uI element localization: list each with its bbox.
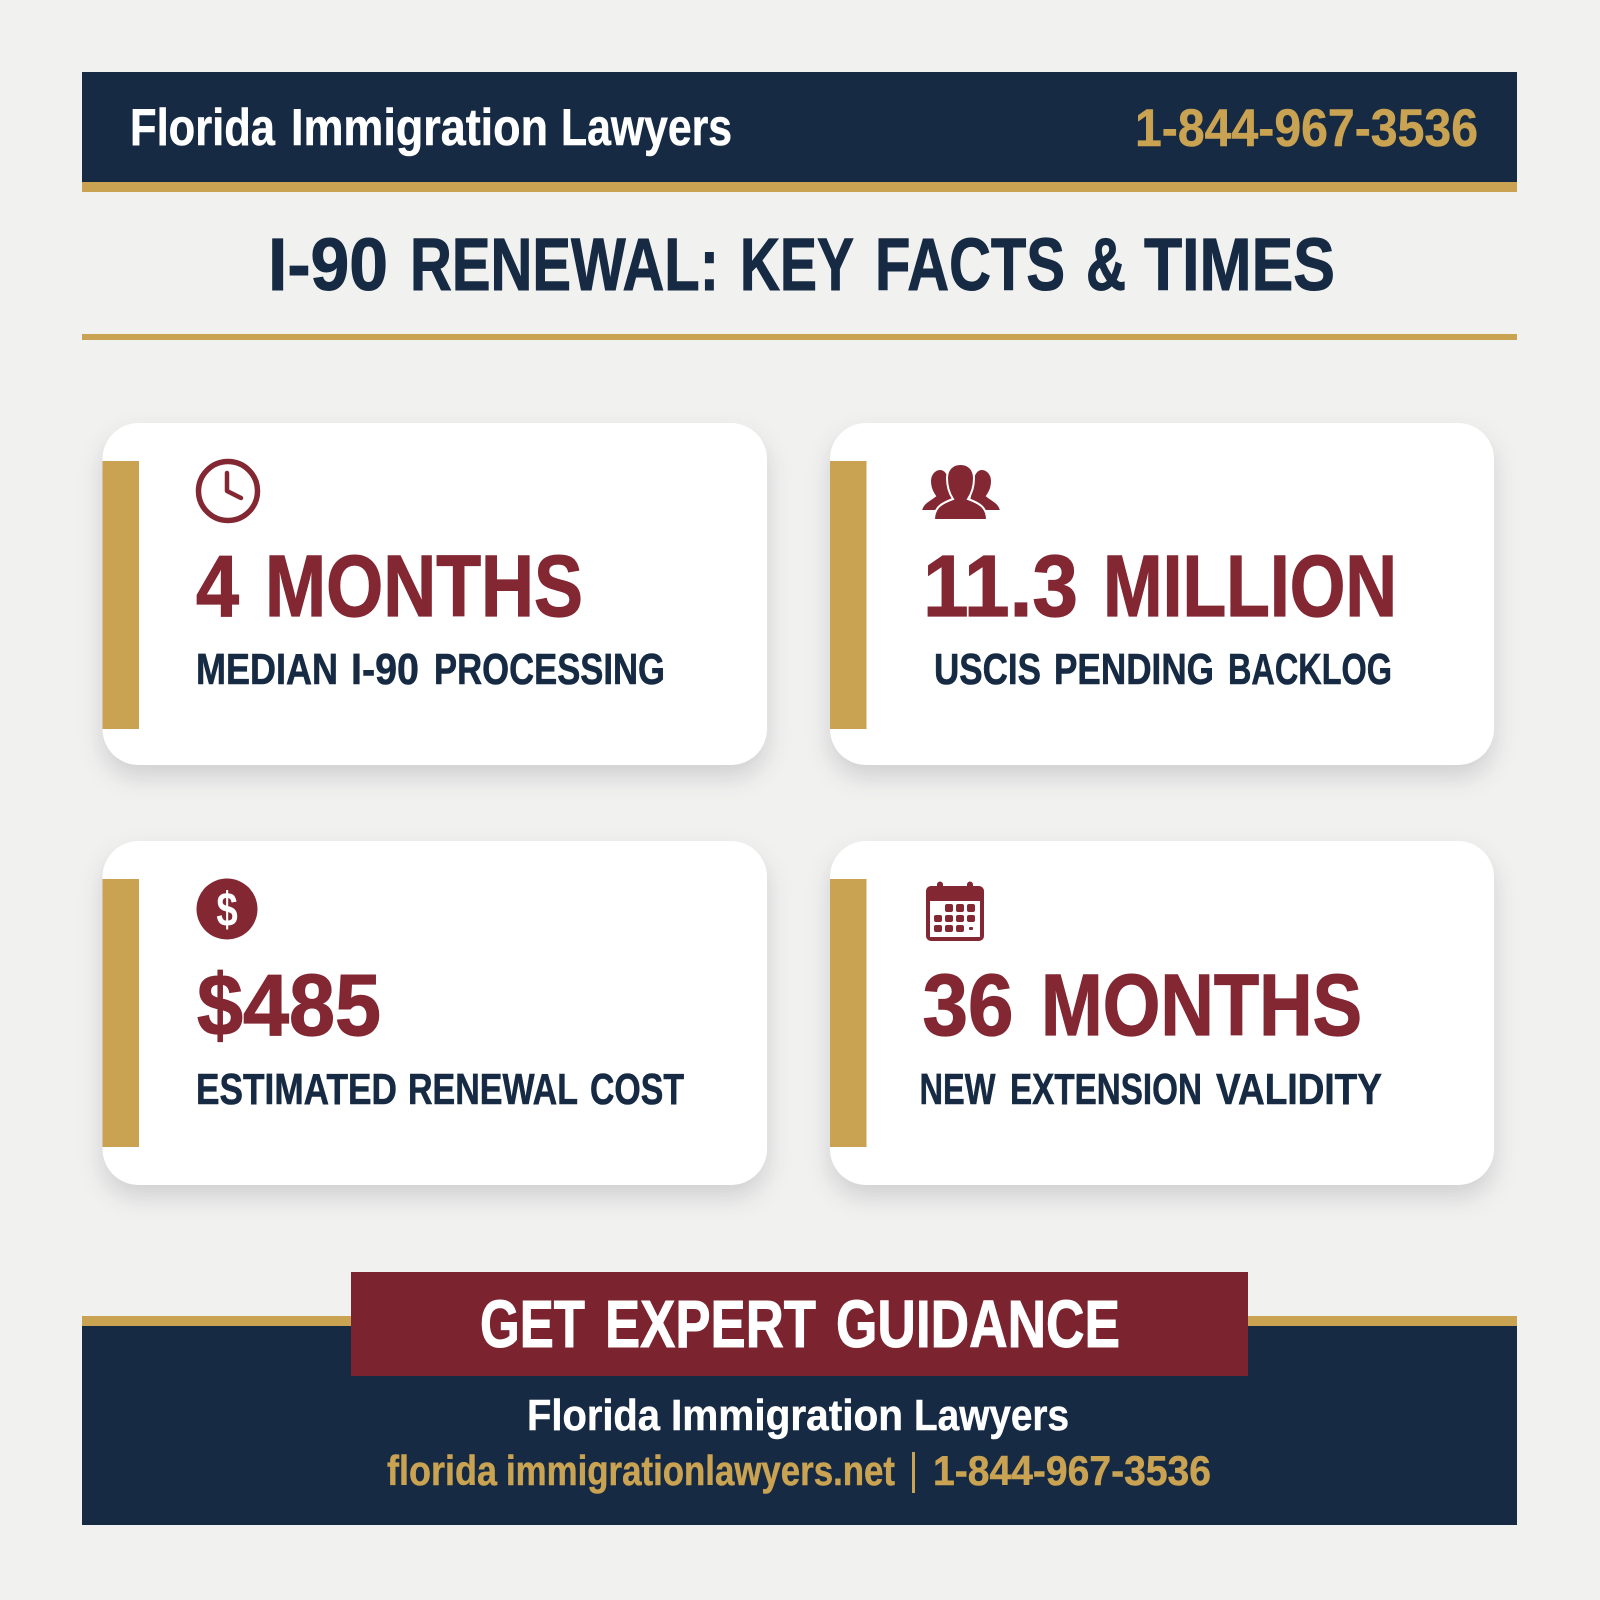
icon: clock (198, 462, 258, 520)
call to action banner (351, 1272, 1248, 1376)
footer firm name: Lawyers (914, 1391, 1069, 1440)
label: median processing (196, 645, 665, 694)
title: & (1086, 223, 1126, 306)
label: median processing: I-90 (351, 645, 419, 694)
firm name: Florida (130, 99, 276, 157)
value: 36 months (922, 957, 1362, 1054)
label: median processing: PROCESSING (434, 645, 665, 694)
label: extension validity: EXTENSION (1010, 1065, 1202, 1114)
title: FACTS (875, 223, 1065, 306)
panel: 11.3 million (830, 423, 1494, 765)
label: pending backlog: BACKLOG (1228, 645, 1392, 694)
label: pending backlog: USCIS (934, 645, 1041, 694)
label: extension validity (920, 1065, 1382, 1114)
label: median processing: MEDIAN (196, 645, 338, 694)
value: 11.3 million: MILLION (1103, 538, 1397, 635)
value: $485: $485 (197, 957, 381, 1054)
label: extension validity: VALIDITY (1216, 1065, 1382, 1114)
title (268, 223, 1335, 306)
call to action banner: GUIDANCE (836, 1287, 1120, 1362)
footer (82, 1272, 1517, 1525)
footer firm name: Immigration (671, 1391, 903, 1440)
panel: 36 months (830, 841, 1494, 1185)
footer website: florida (387, 1447, 498, 1494)
icon: dollar coin: $ (216, 884, 238, 937)
footer firm name (527, 1391, 1069, 1440)
panel: 4 months (102, 423, 767, 765)
footer website (387, 1447, 895, 1494)
label: renewal cost: COST (590, 1065, 684, 1114)
value: 36 months: MONTHS (1041, 957, 1362, 1054)
footer firm name: Florida (527, 1391, 660, 1440)
phone number: 1-844-967-3536 (1135, 99, 1478, 158)
label: renewal cost (196, 1065, 684, 1114)
value: 36 months: 36 (922, 957, 1014, 1054)
call to action banner: EXPERT (605, 1287, 816, 1362)
firm name: Lawyers (561, 99, 732, 157)
icon: calendar (926, 882, 984, 941)
panel: $485 (102, 841, 767, 1185)
value: 11.3 million: 11.3 (923, 538, 1078, 635)
label: renewal cost: ESTIMATED (196, 1065, 397, 1114)
label: extension validity: NEW (920, 1065, 996, 1114)
footer website: immigrationlawyers.net (506, 1447, 895, 1494)
icon: people (921, 464, 1001, 520)
label: renewal cost: RENEWAL (408, 1065, 578, 1114)
title: KEY (740, 223, 854, 306)
call to action banner: GET (480, 1287, 585, 1362)
title: I-90 (268, 223, 388, 306)
title: TIMES (1144, 223, 1335, 306)
header banner (82, 72, 1517, 192)
title: RENEWAL: (410, 223, 719, 306)
value: 11.3 million (923, 538, 1397, 635)
footer phone: 1-844-967-3536 (933, 1447, 1211, 1494)
firm name (130, 99, 732, 157)
label: pending backlog (934, 645, 1392, 694)
icon: dollar coin (196, 878, 258, 940)
firm name: Immigration (291, 99, 548, 157)
value: 4 months: 4 (196, 538, 239, 635)
value: 4 months: MONTHS (265, 538, 583, 635)
label: pending backlog: PENDING (1054, 645, 1214, 694)
